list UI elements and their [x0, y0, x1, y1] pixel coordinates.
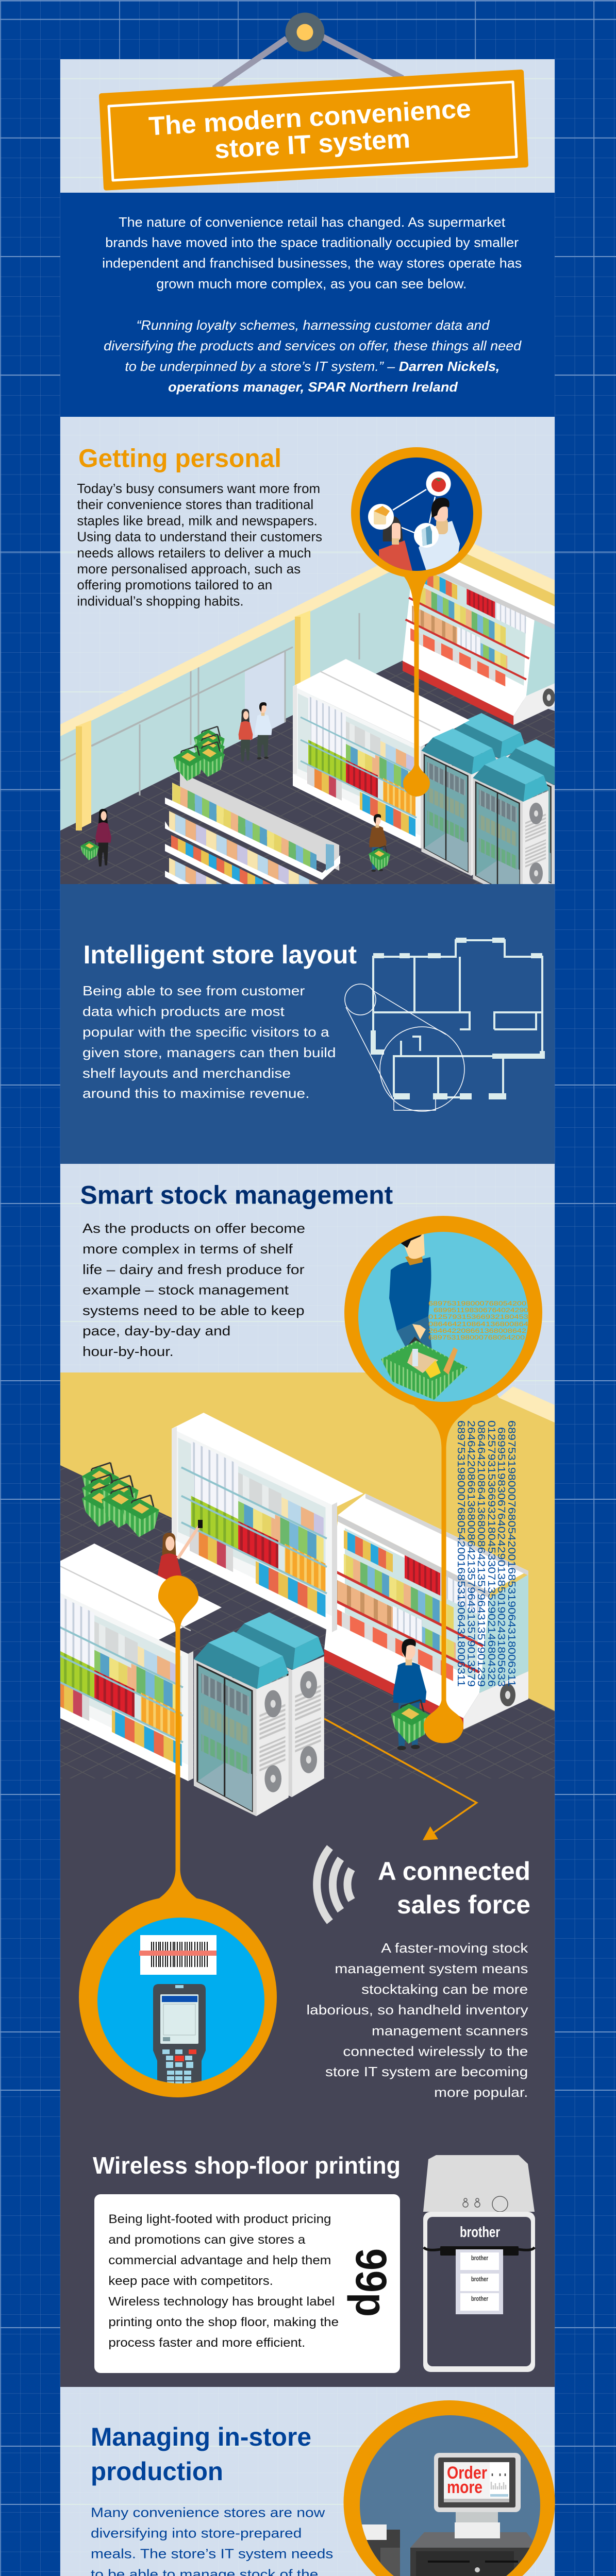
- body text: popular with the specific visitors to a: [82, 1024, 329, 1040]
- intro paragraph: [102, 214, 522, 292]
- fridges: [449, 713, 525, 793]
- body text: offering promotions tailored to an: [77, 577, 272, 592]
- icon: milk: [414, 523, 439, 548]
- icon: floor plan: [345, 940, 542, 1111]
- data numbers: 264642208661368008642: [428, 1327, 526, 1334]
- card text: keep pace with competitors.: [108, 2274, 273, 2288]
- body text: shelf layouts and merchandise: [82, 1065, 291, 1081]
- body text: laborious, so handheld inventory: [306, 2002, 528, 2018]
- data numbers: 689753198000768054200: [428, 1334, 525, 1341]
- body text: diversifying into store-prepared: [91, 2526, 302, 2541]
- label printer: brother: [460, 2224, 500, 2241]
- price label: 99p: [347, 2248, 395, 2317]
- panel: managing in-store production: [60, 2387, 555, 2576]
- data numbers: 689951198306764024290: [434, 1307, 528, 1314]
- data numbers column: 6897531980007680542001685319064318006311: [506, 1420, 517, 1687]
- body text: meals. The store’s IT system needs: [91, 2546, 333, 2562]
- body text: As the products on offer become: [82, 1221, 305, 1236]
- body text: needs allows retailers to deliver a much: [77, 545, 311, 561]
- intro paragraph: independent and franchised businesses, the way stores operate has: [102, 256, 522, 271]
- heading: a connected sales force: [378, 1857, 530, 1919]
- store scene illustration: [28, 1413, 528, 1816]
- card text: printing onto the shop floor, making the: [108, 2315, 339, 2329]
- data numbers: [428, 1300, 528, 1341]
- card text: Wireless technology has brought label: [108, 2295, 335, 2309]
- till: [410, 2532, 538, 2576]
- quote: “Running loyalty schemes, harnessing customer data and: [136, 317, 490, 333]
- title sign board: [102, 72, 526, 188]
- panel: intelligent store layout: [60, 884, 555, 1164]
- fridges: [194, 1613, 324, 1816]
- panel: hanging sign: [60, 59, 555, 193]
- card text: Being light-footed with product pricing: [108, 2212, 331, 2226]
- body text: systems need to be able to keep: [82, 1302, 305, 1318]
- white card: [94, 2194, 400, 2373]
- intro paragraph: brands have moved into the space traditionally occupied by smaller: [105, 235, 519, 250]
- quote: operations manager, SPAR Northern Ireland: [168, 379, 458, 395]
- data numbers column: 6897531980007680542001685319064318006311: [455, 1420, 467, 1687]
- panel: getting personal: [60, 417, 555, 884]
- magnifier: customers and data: [351, 447, 482, 578]
- handheld scanner: [153, 1984, 206, 2092]
- data numbers column: 0125793153669321804533071352902146804326: [486, 1420, 497, 1687]
- body text: [91, 2505, 333, 2576]
- body text: example – stock management: [82, 1282, 289, 1297]
- barcode: [139, 1935, 217, 1975]
- shop assistant: [157, 1520, 203, 1622]
- magnifier: scanner: [79, 1896, 277, 2097]
- basket: [381, 1338, 468, 1400]
- data numbers: 012579315366932180453: [428, 1313, 528, 1320]
- heading: Getting personal: [78, 444, 281, 473]
- body text: store IT system are becoming: [325, 2064, 528, 2079]
- body text: management system means: [335, 1961, 528, 1976]
- magnifier stem: [392, 564, 441, 796]
- heading: wireless printing: Wireless shop-floor printing: [93, 2152, 401, 2179]
- body text: Today’s busy consumers want more from: [77, 481, 320, 496]
- body text: management scanners: [372, 2023, 528, 2038]
- magnifier stem: scanner: [124, 1575, 232, 1919]
- tall shelf: [293, 659, 555, 884]
- tall shelf: [172, 1413, 363, 1632]
- shopper: [389, 1232, 433, 1360]
- body text: [77, 481, 322, 608]
- data numbers column: 689951198306764024290138501902431805633: [495, 1427, 507, 1687]
- man: [419, 498, 460, 571]
- magnifier: till system: [343, 2400, 555, 2576]
- lower shelf: [28, 1544, 222, 1781]
- data numbers: 689753198000768054200: [428, 1300, 526, 1307]
- intro paragraph: The nature of convenience retail has changed. As supermarket: [119, 214, 506, 230]
- body text: connected wirelessly to the: [343, 2043, 528, 2059]
- heading: a connected sales force: sales force: [397, 1890, 530, 1919]
- body text: A faster-moving stock: [381, 1940, 528, 1956]
- cabinet with red base: [324, 1494, 528, 1730]
- title text: store IT system: [214, 124, 411, 164]
- body text: Using data to understand their customers: [77, 529, 322, 545]
- quote: to be underpinned by a store’s IT system.” – Darren Nickels,: [125, 359, 500, 374]
- shoppers: [80, 702, 390, 872]
- store scene illustration: [60, 544, 555, 884]
- magnifier stem: [412, 1404, 474, 1743]
- panel: intro: [60, 193, 555, 417]
- title text: The modern convenience: [148, 94, 472, 141]
- baskets stack: [173, 726, 225, 781]
- body text: Being able to see from customer: [82, 983, 305, 998]
- heading: Managing in-store: [91, 2422, 311, 2451]
- icon: wireless signal: [317, 1848, 352, 1922]
- low aisle shelf: [165, 773, 340, 884]
- body text: [82, 983, 336, 1101]
- icon: hanging straps and pin: [214, 12, 403, 89]
- monitor: more: [447, 2478, 482, 2497]
- body text: staples like bread, milk and newspapers.: [77, 513, 318, 528]
- heading: Smart stock management: [80, 1181, 393, 1210]
- orange arrow: [324, 1719, 476, 1840]
- heading: a connected sales force: A connected: [378, 1857, 530, 1886]
- icon: bread: [368, 504, 394, 530]
- title text: [148, 94, 473, 167]
- quote: [104, 317, 522, 395]
- body text: [82, 1221, 305, 1359]
- card text: commercial advantage and help them: [108, 2253, 331, 2267]
- data numbers: 086464210864136800864: [428, 1320, 528, 1328]
- woman: [379, 516, 412, 571]
- body text: data which products are most: [82, 1004, 285, 1019]
- heading: production: [91, 2457, 223, 2486]
- shopper with basket: [391, 1639, 430, 1750]
- body text: individual’s shopping habits.: [77, 593, 244, 608]
- body text: [306, 1940, 528, 2100]
- data numbers column: [455, 1420, 517, 1687]
- heading: Intelligent store layout: [84, 940, 357, 969]
- label printer: [423, 2155, 535, 2372]
- screen text: Order: [447, 2463, 487, 2483]
- receipt printer: [362, 2524, 400, 2576]
- body text: Many convenience stores are now: [91, 2505, 325, 2520]
- data numbers column: 2646422086613680086421357964313579013579: [465, 1420, 477, 1687]
- data numbers column: 0864642108641368008642135796431357901239: [475, 1420, 487, 1687]
- body text: around this to maximise revenue.: [82, 1086, 309, 1101]
- card text: [108, 2212, 339, 2350]
- body text: given store, managers can then build: [82, 1045, 336, 1060]
- body text: life – dairy and fresh produce for: [82, 1262, 305, 1277]
- intro paragraph: grown much more complex, as you can see below.: [156, 276, 467, 292]
- quote: diversifying the products and services on offer, these things all need: [104, 338, 522, 353]
- card text: and promotions can give stores a: [108, 2233, 306, 2247]
- body text: more personalised approach, such as: [77, 561, 301, 577]
- body text: more complex in terms of shelf: [82, 1241, 293, 1257]
- label printer: brother: [471, 2295, 488, 2302]
- body text: more popular.: [434, 2084, 528, 2100]
- label printer: brother: [471, 2275, 488, 2283]
- heading: [91, 2422, 311, 2486]
- label printer: brother: [471, 2254, 488, 2262]
- card text: process faster and more efficient.: [108, 2336, 305, 2350]
- body text: stocktaking can be more: [361, 1981, 528, 1997]
- monitor: [434, 2453, 521, 2538]
- body text: their convenience stores than traditional: [77, 497, 313, 512]
- body text: pace, day-by-day and: [82, 1323, 230, 1338]
- magnifier: shopper with basket: [344, 1216, 542, 1410]
- icon: tomato: [426, 471, 451, 496]
- baskets stack: [82, 1463, 159, 1537]
- panel: smart stock management: [28, 1164, 555, 2387]
- cabinet with red base: [403, 559, 565, 725]
- body text: hour-by-hour.: [82, 1344, 174, 1359]
